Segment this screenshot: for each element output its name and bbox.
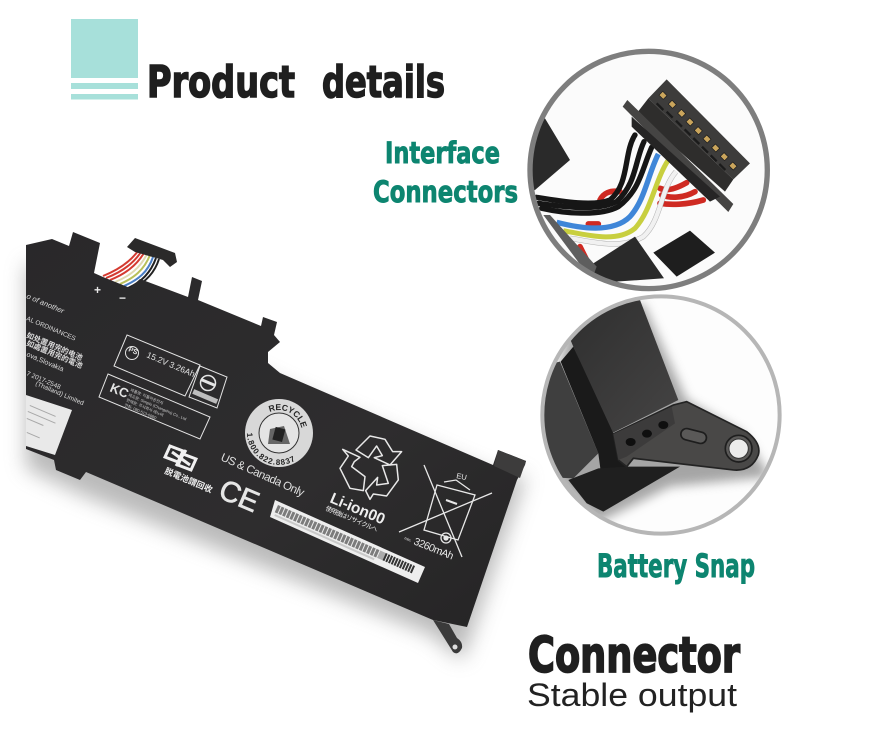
polarity marks: + [94,283,101,297]
warning text: AL ORDINANCES [25,315,77,343]
KC box [99,374,210,439]
battery body [26,232,526,627]
snap eyelet [725,435,752,462]
title: Product [147,57,295,108]
caption heading: Connector [528,627,741,684]
warning text: 7 2017-2548 [25,370,62,391]
crossed-out bin icon: EU [456,471,468,482]
black wires [537,135,652,213]
battery shadow [26,262,526,660]
snap holes [626,421,668,446]
caption subheading: Stable output [527,677,737,713]
accent block [71,19,138,100]
crossed-out bin icon [399,465,492,563]
warning text: o of another [25,292,66,316]
label: battery snap: Battery Snap [597,547,755,585]
battery side ribbing [494,450,526,478]
circle frame [530,51,767,289]
detail circle: interface connector [527,51,767,289]
connector housing [623,79,750,212]
snap tab [613,402,759,470]
battery wires [103,251,159,289]
RBRC recycle seal: 1.800.822.8837 [246,433,294,465]
KC box: 판매원: 주식회사 레노버 [126,396,165,418]
warning text: ova,Slovakia [25,351,65,373]
warning text: 如處置用完的電池 [25,338,85,370]
detail circle: battery snap [537,296,780,534]
side panel [544,362,598,478]
region note: US & Canada Only [219,452,306,499]
title: details [322,57,445,108]
groove [560,346,626,468]
RBRC recycle seal: RECYCLE [268,404,307,428]
lower-left body edge [543,215,597,272]
label: interface connectors [373,136,518,209]
upper body [563,300,678,433]
rating box: 15.2V 3.26Ah [145,350,197,379]
circle frame [542,296,780,534]
connector slots [657,103,725,170]
yellow wire [563,160,668,237]
battery photo [14,232,532,664]
Li-ion text: Li-ion00 [327,490,387,528]
battery mounting foot [433,620,462,653]
connector gold pins [659,91,737,170]
barcode label [270,500,425,583]
KC box: 제조원: Simplo (Changshu) Co., Ltd [128,391,188,421]
polarity marks [94,283,126,305]
polarity marks: − [119,291,126,305]
crossed-out bin icon: min. [404,535,413,543]
title [147,57,445,108]
KC box: KC [108,380,132,401]
recycling arrows icon [340,436,402,499]
KC box: 전화: 080-513-0880 [124,401,158,421]
Li-ion text: 使用後はリサイクルへ [324,504,380,534]
white wire [570,172,676,244]
rating box: PS [127,346,139,357]
certification box [189,366,227,408]
white sticker [26,395,72,455]
lower body [568,467,680,512]
battery connector [127,238,177,267]
CE mark: CE [214,474,264,519]
label: interface connectors: Connectors [373,175,518,209]
rating box [114,335,200,396]
red wires [580,183,703,260]
label: interface connectors: Interface [385,136,500,170]
warning text: 如处置用完的电池 [25,330,85,362]
crossed-out bin icon: 3260mAh [412,536,455,563]
snap slot [680,427,708,445]
blue wire [557,154,658,228]
KC box: 제품명: 리튬이온전지 [130,386,165,406]
warning text [25,292,85,407]
soft shadow [537,303,770,523]
lower battery blocks [653,231,715,277]
left battery block [532,118,570,190]
recycle emblem icon [163,446,215,495]
RBRC recycle seal [245,399,313,467]
recycle emblem icon: 脱電池謂回收 [163,466,215,495]
warning text: (Thailand) Limited [34,380,85,407]
